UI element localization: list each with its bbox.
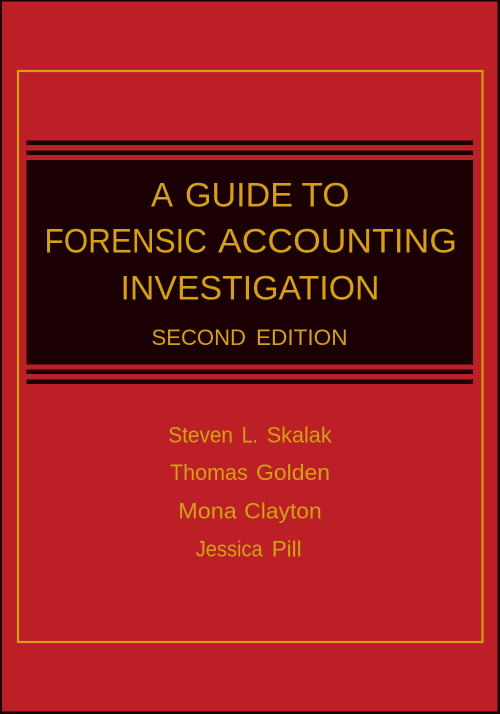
title: TO: [302, 176, 350, 214]
authors: Mona: [178, 498, 237, 523]
authors: Steven: [168, 422, 233, 447]
title: ACCOUNTING: [218, 223, 457, 261]
edition: EDITION: [256, 325, 348, 350]
authors: Golden: [256, 460, 330, 485]
title: [44, 176, 457, 308]
authors: Clayton: [244, 498, 322, 523]
edition: SECOND: [152, 325, 246, 350]
authors: Jessica: [196, 537, 263, 562]
title: A: [151, 176, 173, 214]
top double rule: [26, 140, 473, 155]
authors: [168, 422, 332, 562]
title: INVESTIGATION: [120, 270, 380, 308]
authors: Pill: [272, 537, 302, 562]
authors: Thomas: [170, 460, 248, 485]
authors: Skalak: [267, 422, 332, 447]
bottom double rule: [26, 370, 473, 384]
gold frame: [18, 71, 482, 642]
title: GUIDE: [185, 176, 293, 214]
title panel: [26, 160, 473, 364]
authors: L.: [242, 422, 258, 447]
title: FORENSIC: [44, 223, 207, 261]
edition: [152, 325, 348, 350]
